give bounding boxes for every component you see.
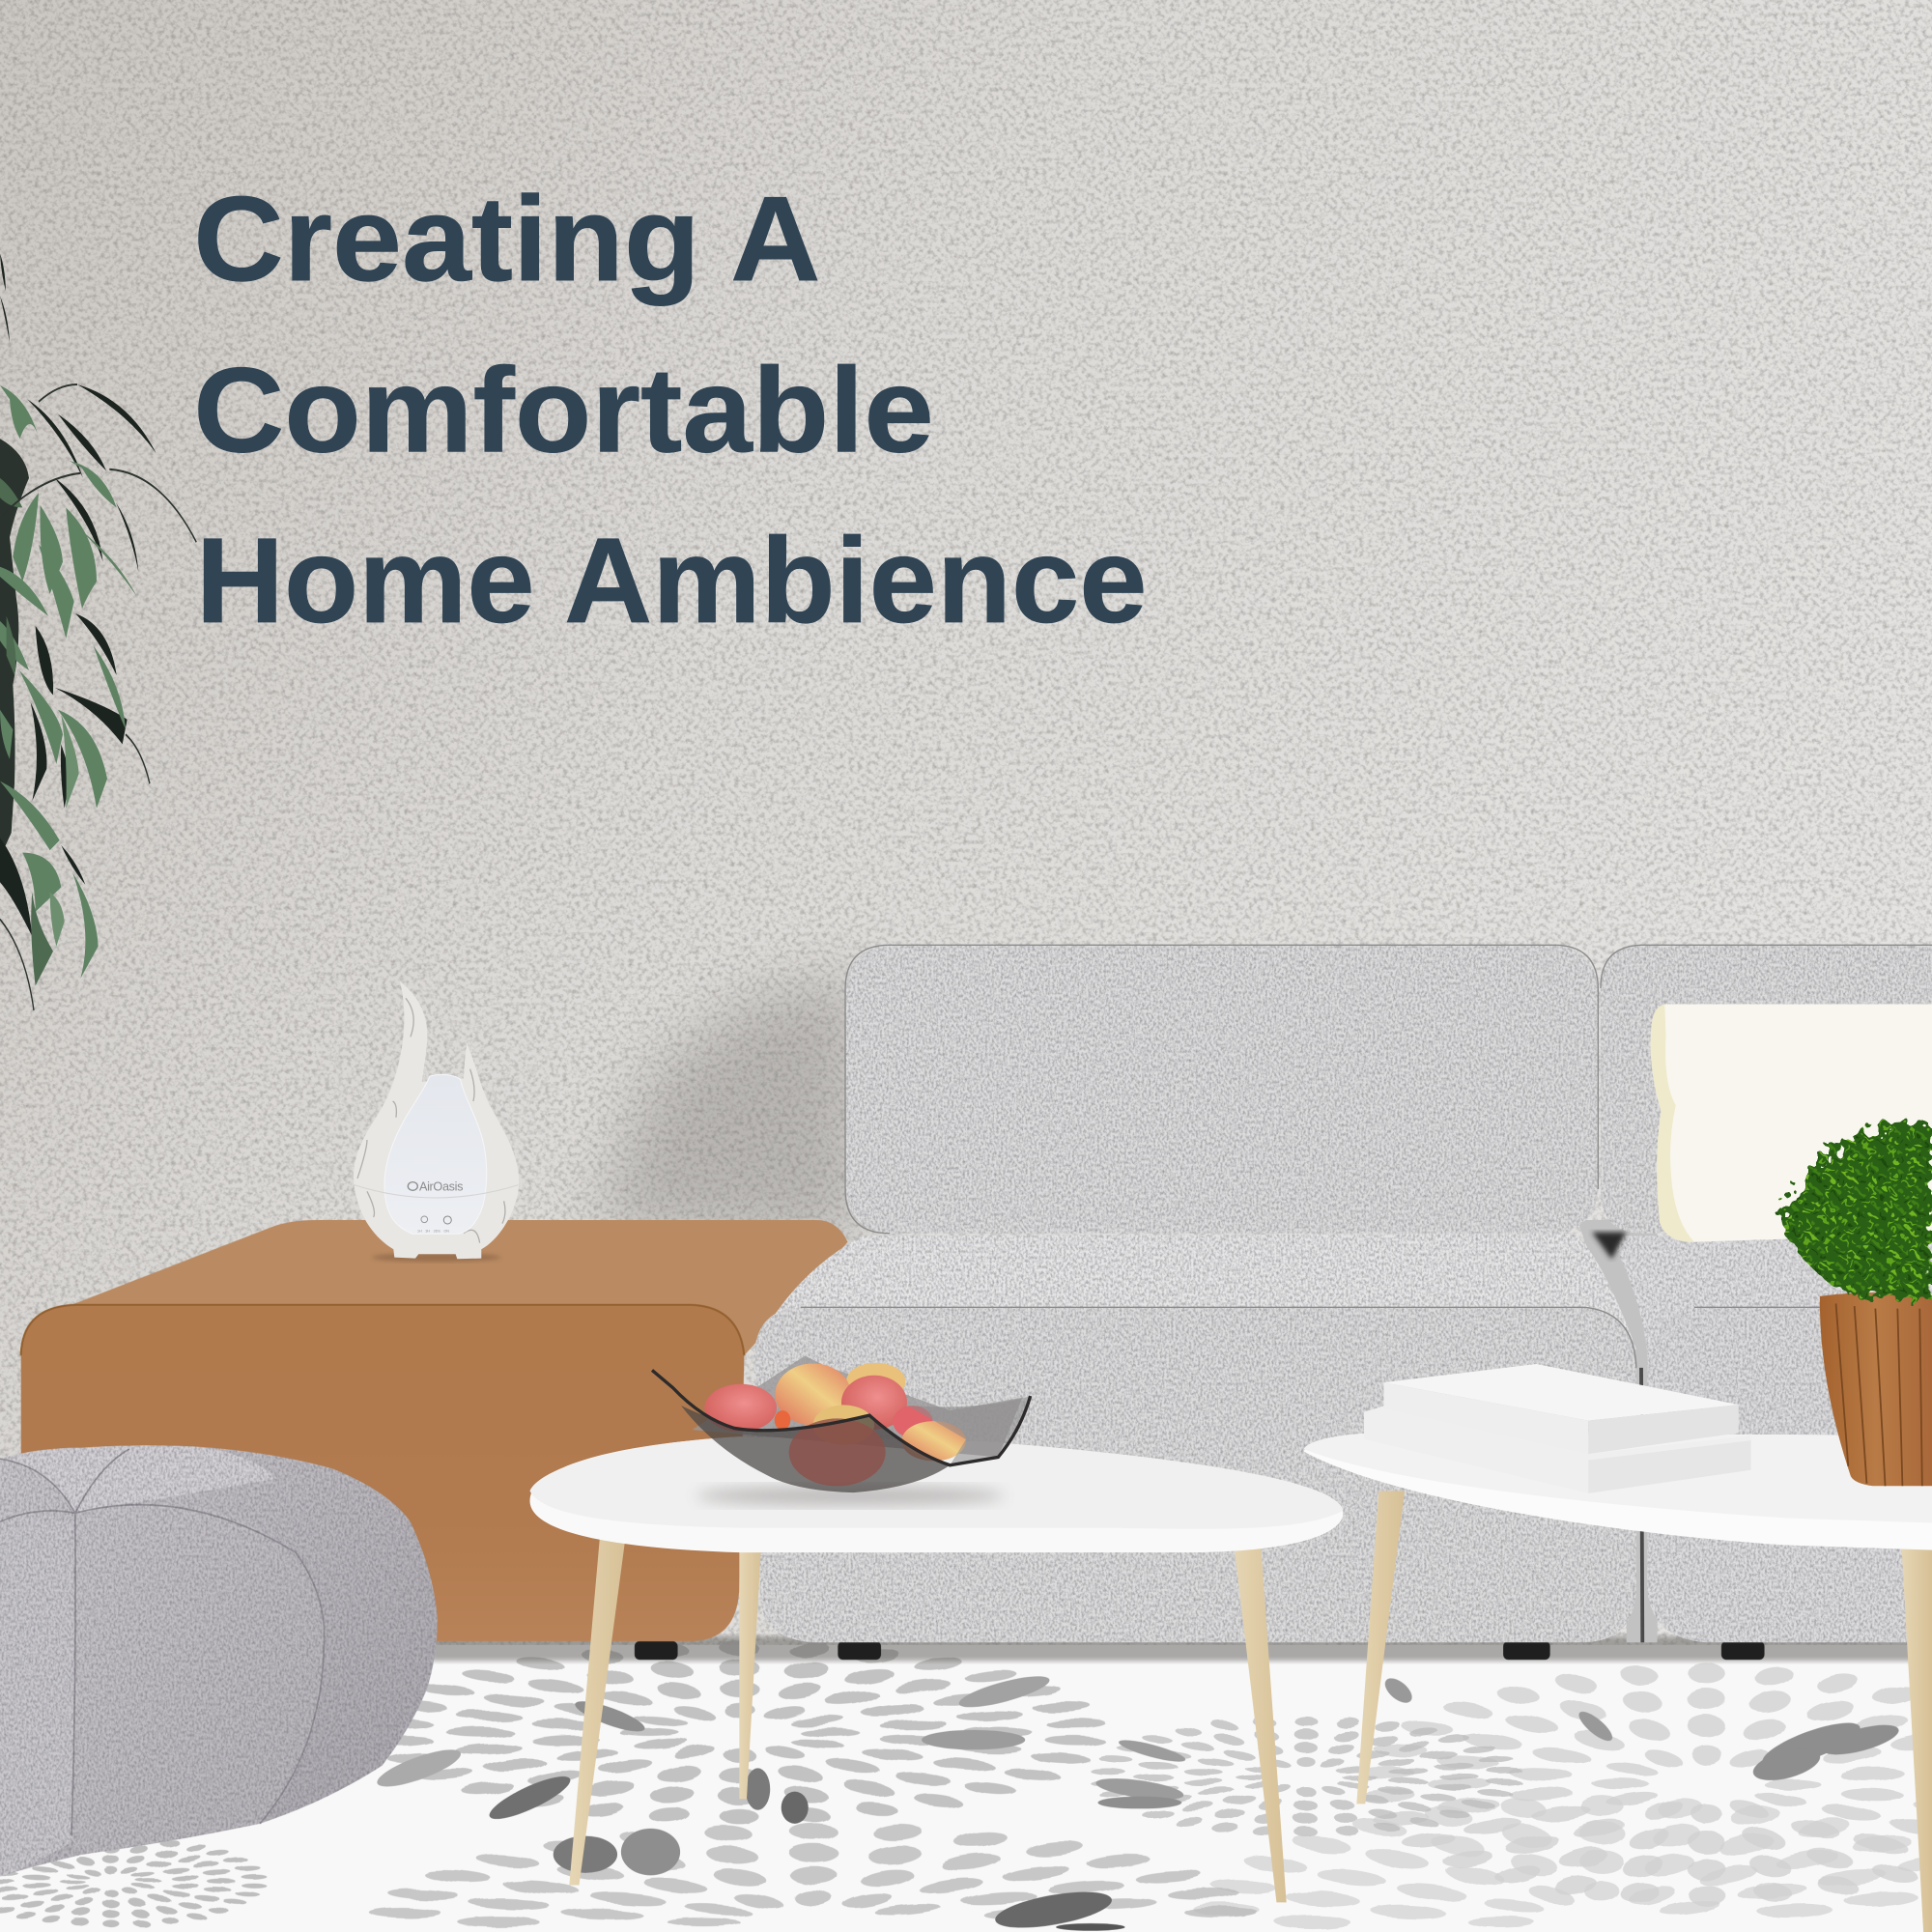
plant: green shrub <box>1776 1123 1932 1301</box>
stacked white books <box>1364 1364 1750 1493</box>
shadow <box>372 1253 500 1262</box>
sofa seams and dark gap <box>801 945 1932 1642</box>
sofa backing behind the gap between sections <box>1577 1220 1658 1642</box>
apples <box>704 1363 966 1461</box>
ottoman: tan leather bench <box>21 1220 848 1641</box>
coffee table top: left <box>529 1436 1343 1552</box>
thin leaf tips <box>0 384 196 1010</box>
title <box>193 172 1147 648</box>
logo text: AirOasis <box>419 1180 463 1194</box>
pot: wooden planter <box>1820 1293 1932 1486</box>
humidifier: AirOasis marble diffuser <box>354 981 519 1262</box>
title: Creating A <box>193 172 820 306</box>
green leaves <box>0 385 137 985</box>
glass bowl front <box>681 1406 950 1492</box>
marble body <box>354 981 519 1259</box>
dark leaf mass <box>0 439 29 858</box>
bowl of apples <box>652 1355 1031 1492</box>
title: Home Ambience <box>196 514 1147 648</box>
right glass wing <box>908 1396 1031 1465</box>
rug with floral pattern <box>0 1614 1932 1932</box>
power button icon <box>443 1216 451 1224</box>
back of glass bowl <box>693 1355 1022 1457</box>
floor shadow and sofa feet <box>431 1636 1932 1661</box>
plant: tall leaves on the left <box>0 254 196 1010</box>
timer labels: 1H 3H 3DS ON <box>417 1229 449 1233</box>
pouf: lavender grey <box>0 1445 438 1877</box>
title: Comfortable <box>193 343 934 477</box>
apples seen through glass <box>789 1418 886 1486</box>
light button icon <box>421 1216 428 1223</box>
coffee table top: right <box>1303 1432 1932 1550</box>
table legs: first table <box>569 1534 1287 1902</box>
white mist dome <box>384 1074 487 1234</box>
marble veins <box>357 998 505 1243</box>
sofa: main section back and seat <box>754 945 1636 1642</box>
table legs: second table <box>1356 1491 1932 1932</box>
dark leaves <box>0 254 156 936</box>
logo leaf <box>408 1182 417 1190</box>
sofa: right section <box>1601 945 1932 1642</box>
cushion: cream pillow <box>1651 1005 1932 1242</box>
base seam <box>355 1185 519 1198</box>
